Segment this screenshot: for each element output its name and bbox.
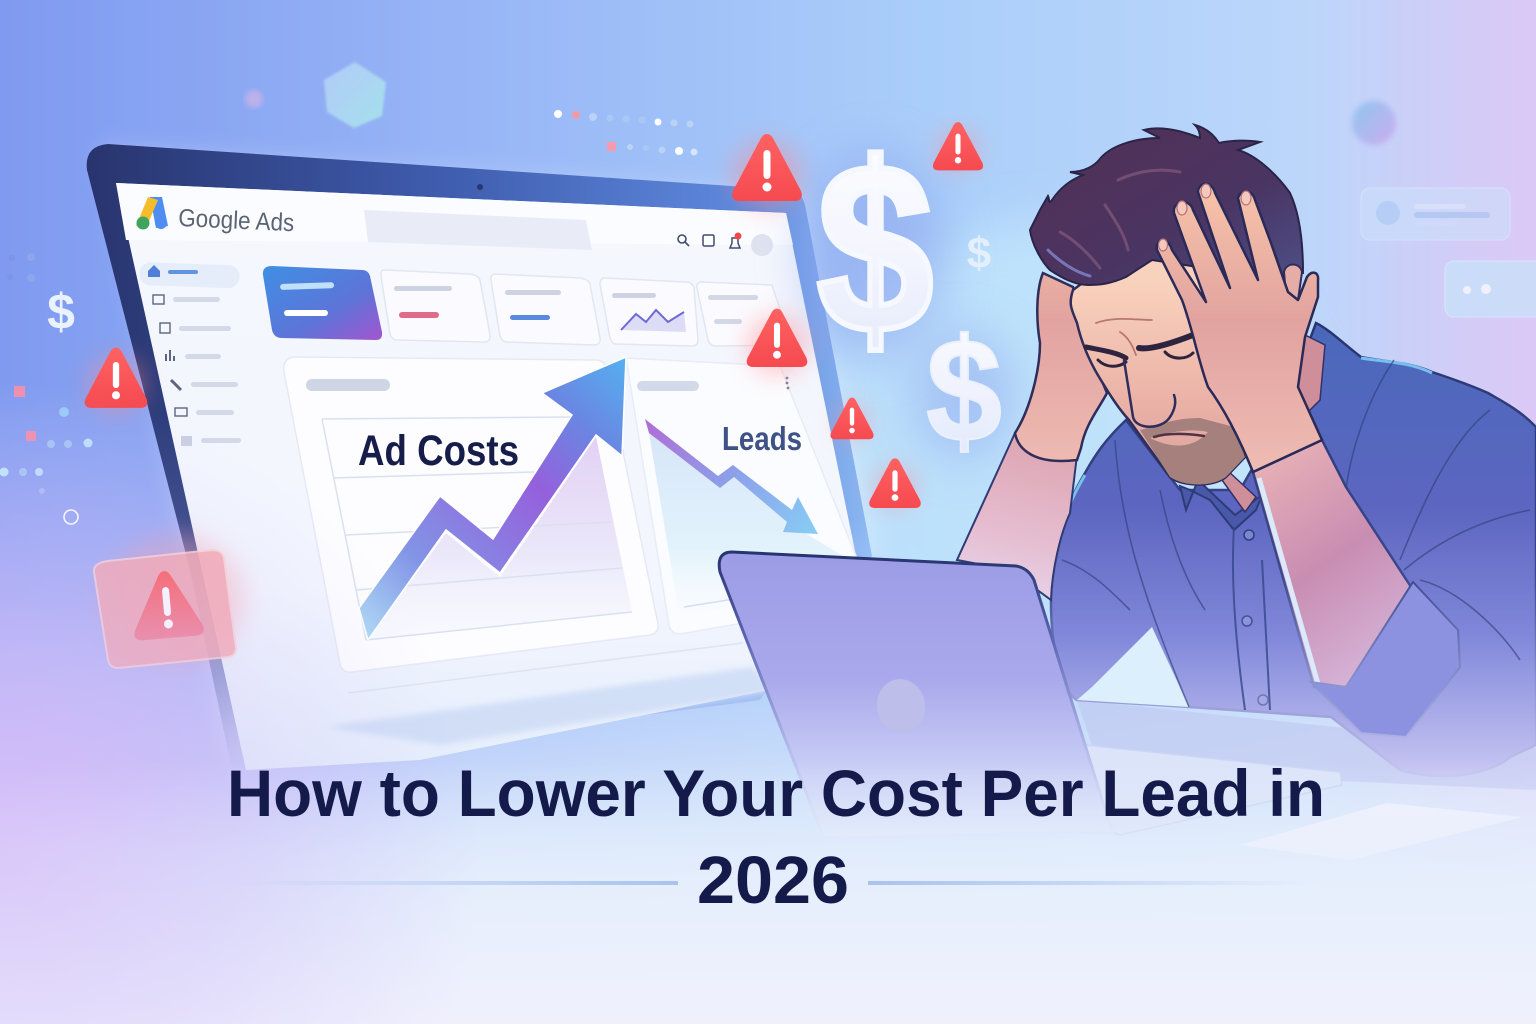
face features (1086, 319, 1204, 437)
small laptop (719, 552, 1112, 838)
shirt placket and buttons (1233, 527, 1270, 710)
ear (1284, 264, 1302, 300)
right forearm (1253, 440, 1413, 687)
hair highlights (1048, 170, 1180, 276)
icon: floating notification card bottom (1445, 261, 1536, 317)
icon: warning top right (933, 122, 983, 170)
icon: small dollar right: $ (967, 229, 991, 278)
icon: sphere right (1352, 101, 1396, 145)
right hand (1157, 184, 1322, 472)
KPI card 4 with sparkline (600, 278, 698, 346)
panel: leads chart (626, 358, 866, 634)
beard (1140, 418, 1245, 484)
brand name: Google Ads (178, 204, 295, 237)
dollar glow (805, 150, 945, 360)
dollar glow medium (914, 330, 1014, 460)
laptop bezel (87, 144, 872, 770)
icon: warning lower (869, 458, 921, 508)
screen lower band (325, 667, 772, 745)
icon: warning small middle (830, 398, 874, 439)
lips (1150, 430, 1208, 446)
Google Ads logo (136, 197, 295, 237)
left hand (1015, 273, 1107, 461)
shirt sleeve and torso (1051, 323, 1536, 776)
red warning triangles (85, 122, 983, 668)
warning glows (88, 130, 978, 507)
laptop glow (100, 146, 880, 760)
hair (1030, 125, 1303, 285)
icon: small sphere left (245, 90, 263, 108)
KPI card 2 (381, 270, 490, 342)
keyboard (1085, 745, 1342, 835)
search bar (364, 210, 592, 250)
chart grid (322, 417, 632, 640)
icon: warning left (85, 348, 147, 408)
face (1071, 250, 1245, 485)
KPI card 3 (491, 274, 600, 345)
label: ad costs: Ad Costs (358, 427, 519, 475)
toolbar icons (678, 232, 773, 256)
rolled sleeve (1311, 582, 1460, 737)
forearm highlight (1259, 478, 1318, 684)
large laptop with Google Ads dashboard (87, 144, 880, 770)
panel: lower dashboard card outline (348, 643, 743, 693)
panel: ad costs chart (284, 357, 658, 672)
title divider lines (230, 881, 1316, 885)
paper on desk (1240, 803, 1522, 860)
laptop screen (116, 183, 856, 770)
label: leads: Leads (722, 420, 802, 457)
bottom fade behind title (0, 760, 1536, 1024)
neck (1222, 330, 1325, 512)
worried man (719, 125, 1536, 860)
left forearm (957, 433, 1077, 600)
title (227, 756, 1325, 918)
icon: warning top centre (732, 134, 802, 201)
collar (1180, 480, 1262, 530)
icon: small dollar left: $ (47, 284, 75, 340)
KPI card 5 (697, 282, 792, 346)
icon: floating notification card top (1361, 188, 1510, 240)
KPI card 1 (263, 266, 382, 340)
bottom-left lilac wash (0, 340, 520, 1024)
dollar signs (47, 114, 1014, 473)
sidebar (139, 262, 241, 446)
finger nails and creases (1158, 184, 1251, 251)
rising arrow (359, 357, 626, 640)
icon: warning on cards (747, 309, 807, 367)
shoulder rim light (1062, 358, 1432, 528)
gap between arm and torso (1077, 627, 1189, 707)
decorative particles (0, 110, 698, 524)
falling arrow (645, 419, 818, 534)
icon: floating hexagon (324, 62, 386, 128)
icon: warning badge (94, 535, 245, 668)
shirt folds (1062, 360, 1530, 707)
title: 2026 (697, 843, 849, 918)
desk top (1077, 700, 1536, 790)
title: How to Lower Your Cost Per Lead in (227, 756, 1325, 830)
icon: large dollar: $ (816, 114, 934, 384)
area under cost line (368, 437, 632, 640)
icon: medium dollar: $ (926, 309, 1002, 473)
